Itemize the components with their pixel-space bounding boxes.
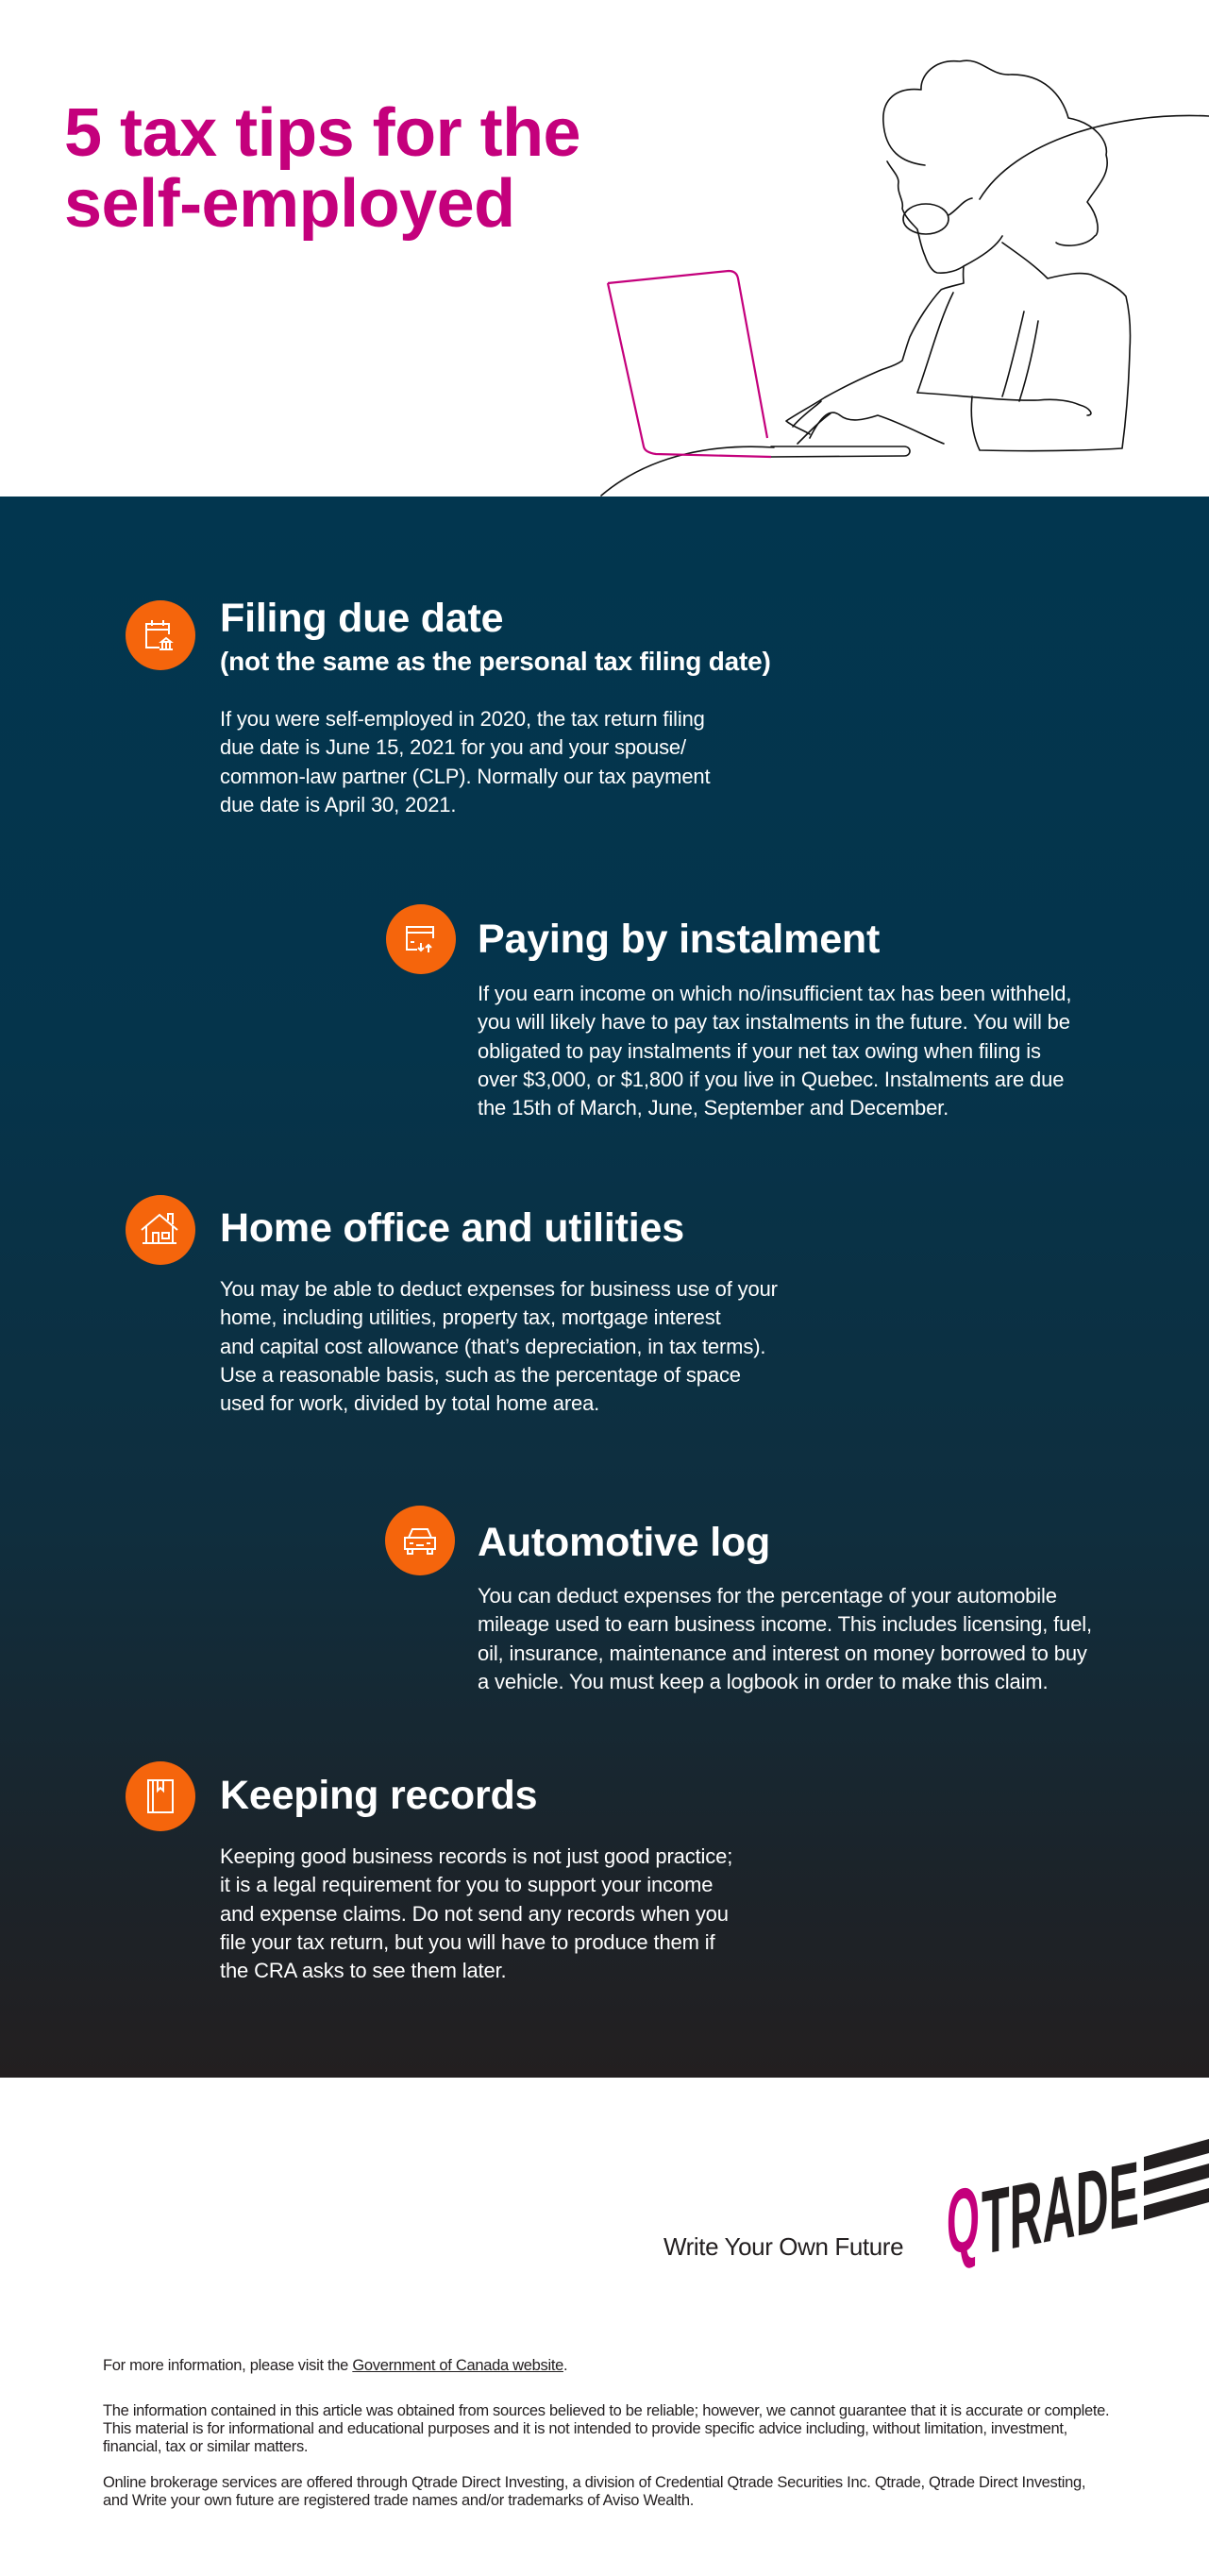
- panel: tips: [0, 497, 1209, 2078]
- text: automotive: mileage used to earn business income. This includes licensing, fuel,: [478, 1612, 1092, 1636]
- text: instalment: over $3,000, or $1,800 if you live in Quebec. Instalments are due: [478, 1068, 1064, 1091]
- icon: calendar: [126, 600, 195, 670]
- heading: automotive: Automotive log: [478, 1520, 770, 1565]
- text: filing due date: If you were self-employed in 2020, the tax return filing: [220, 707, 705, 731]
- text: records: and expense claims. Do not send any records when you: [220, 1902, 729, 1926]
- text: instalment: If you earn income on which no/insufficient tax has been withheld,: [478, 982, 1071, 1005]
- footer: more info: For more information, please visit the Government of Canada website.: [103, 2357, 567, 2374]
- text: instalment: the 15th of March, June, September and December.: [478, 1096, 949, 1120]
- text: automotive: [478, 1584, 1092, 1693]
- text: home office: You may be able to deduct expenses for business use of your: [220, 1277, 778, 1301]
- text: instalment: [478, 982, 1071, 1120]
- heading: instalment: Paying by instalment: [478, 917, 880, 962]
- text: filing due date: common-law partner (CLP). Normally our tax payment: [220, 765, 710, 788]
- icon: house: [126, 1195, 195, 1265]
- text: instalment: obligated to pay instalments if your net tax owing when filing is: [478, 1039, 1041, 1063]
- text: records: it is a legal requirement for you to support your income: [220, 1873, 713, 1896]
- text: records: Keeping good business records is not just good practice;: [220, 1844, 732, 1868]
- heading: records: Keeping records: [220, 1773, 537, 1818]
- tagline: Write Your Own Future: [663, 2232, 903, 2261]
- title: 5 tax tips for the: [64, 95, 580, 171]
- footer: disclaimer: financial, tax or similar matters.: [103, 2438, 308, 2455]
- text: home office: and capital cost allowance (that’s depreciation, in tax terms).: [220, 1335, 765, 1358]
- illustration: woman at laptop: [600, 59, 1209, 497]
- text: home office: [220, 1277, 778, 1415]
- text: records: the CRA asks to see them later.: [220, 1959, 507, 1982]
- text: filing due date: due date is June 15, 2021 for you and your spouse/: [220, 735, 686, 759]
- icon: car: [385, 1506, 455, 1575]
- text: filing due date: due date is April 30, 2021.: [220, 793, 456, 817]
- text: home office: home, including utilities, property tax, mortgage interest: [220, 1305, 721, 1329]
- text: home office: used for work, divided by total home area.: [220, 1391, 599, 1415]
- text: filing due date: [220, 707, 710, 817]
- icon: card: [386, 904, 456, 974]
- text: automotive: You can deduct expenses for the percentage of your automobile: [478, 1584, 1057, 1608]
- footer: disclaimer: This material is for informational and educational purposes and it is not intended to provide specific advice including, without limitation, investment,: [103, 2420, 1067, 2437]
- text: automotive: oil, insurance, maintenance and interest on money borrowed to buy: [478, 1642, 1087, 1665]
- heading: home office: Home office and utilities: [220, 1205, 684, 1251]
- footer: disclaimer: The information contained in this article was obtained from sources believed to be reliable; however, we cannot guarantee that it is accurate or complete.: [103, 2402, 1109, 2419]
- title: [64, 95, 580, 242]
- subheading: (not the same as the personal tax filing date): [220, 647, 771, 676]
- text: records: file your tax return, but you will have to produce them if: [220, 1930, 714, 1954]
- text: automotive: a vehicle. You must keep a logbook in order to make this claim.: [478, 1670, 1048, 1693]
- footer: trademarks: Online brokerage services are offered through Qtrade Direct Investing, a division of Credential Qtrade Securities Inc. Qtrade, Qtrade Direct Investing,: [103, 2474, 1085, 2491]
- footer: disclaimer: [103, 2402, 1109, 2455]
- logo: QTRADE: Q: [947, 2165, 980, 2274]
- footer: trademarks: and Write your own future are registered trade names and/or trademarks of Aviso Wealth.: [103, 2492, 694, 2509]
- text: records: [220, 1844, 732, 1982]
- footer: trademarks: [103, 2474, 1085, 2509]
- icon: book: [126, 1761, 195, 1831]
- title: self-employed: [64, 166, 515, 242]
- heading: filing due date: Filing due date: [220, 596, 503, 641]
- text: instalment: you will likely have to pay tax instalments in the future. You will be: [478, 1010, 1070, 1034]
- text: home office: Use a reasonable basis, such as the percentage of space: [220, 1363, 741, 1387]
